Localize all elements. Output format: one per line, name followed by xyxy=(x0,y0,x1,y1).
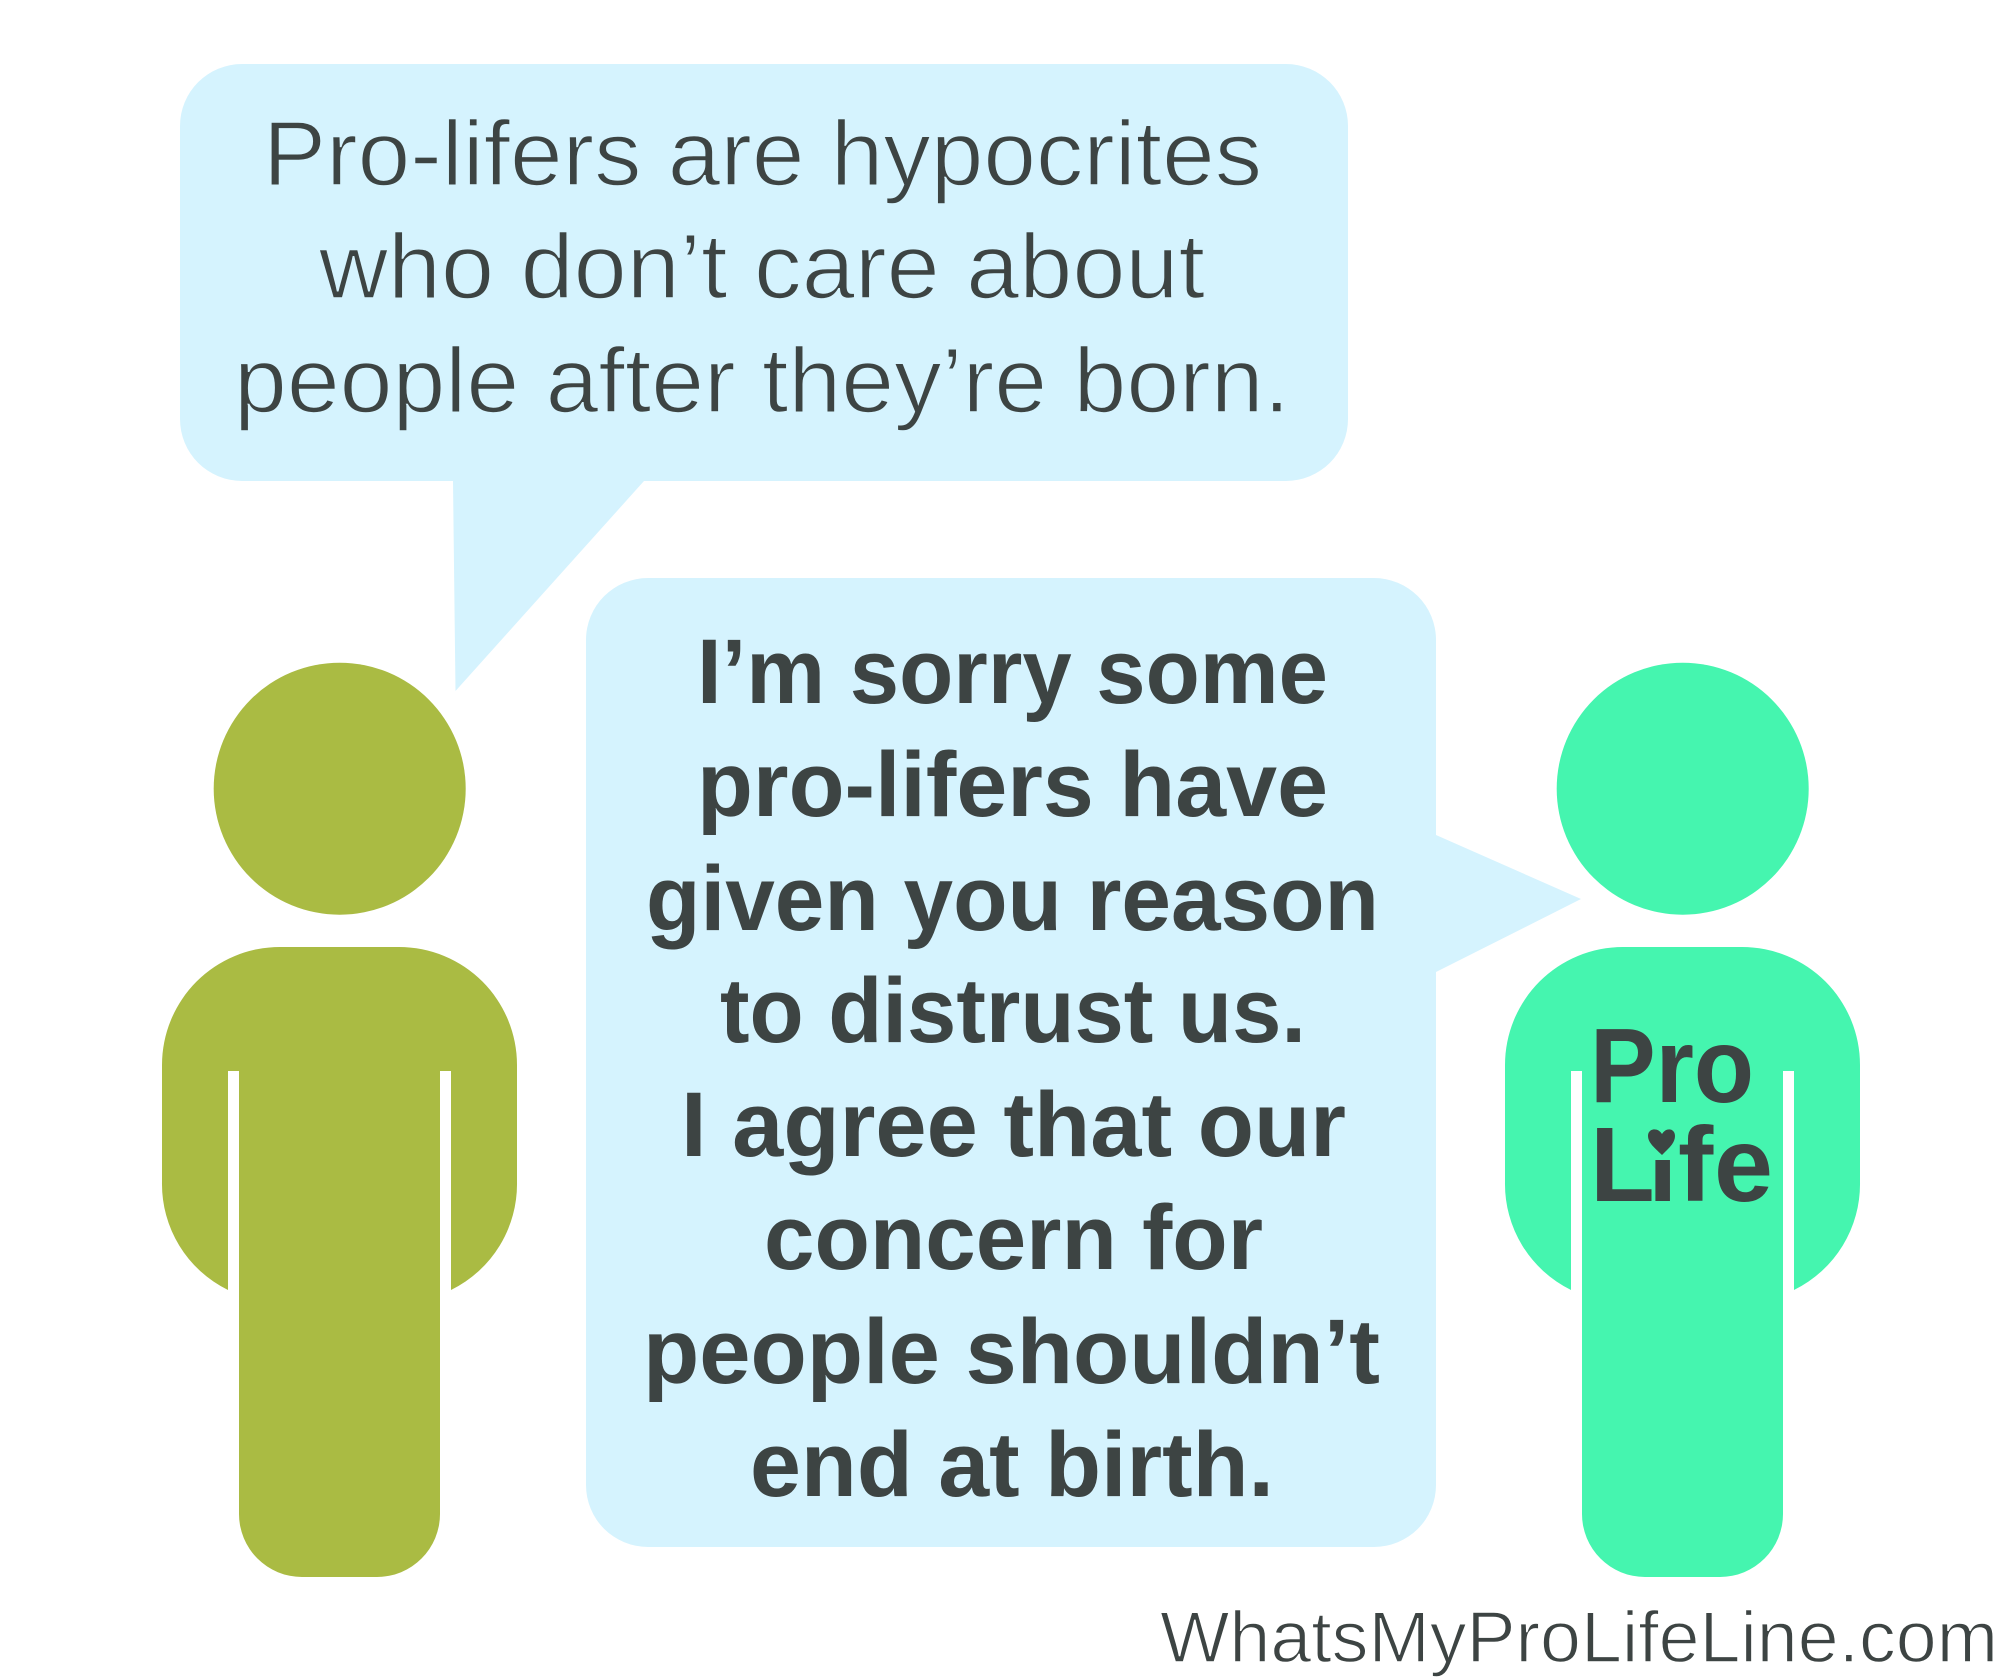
pro-lifer response text: concern for xyxy=(764,1187,1263,1289)
pro-lifer response text: to distrust us. xyxy=(720,960,1306,1062)
critic statement text: who don’t care about xyxy=(318,216,1205,318)
critic statement text: Pro-lifers are hypocrites xyxy=(263,103,1262,205)
pro-lifer response text: people shouldn’t xyxy=(643,1301,1380,1403)
shirt logo: Pro Life xyxy=(1590,1007,1773,1224)
icon: heart xyxy=(1648,1129,1675,1155)
critic statement text xyxy=(234,103,1290,432)
pro-lifer response text: end at birth. xyxy=(750,1414,1274,1516)
figure: pro-lifer (mint) xyxy=(1505,663,1860,1577)
pro-lifer response text: given you reason xyxy=(646,848,1379,950)
i-dot mask xyxy=(1651,1122,1675,1160)
critic statement text: people after they’re born. xyxy=(234,330,1290,432)
pro-lifer response text xyxy=(643,621,1380,1516)
torso and arms xyxy=(162,947,517,1577)
head xyxy=(214,663,466,915)
pro-lifer response text: I’m sorry some xyxy=(697,621,1328,723)
pro-lifer response text: I agree that our xyxy=(681,1074,1346,1176)
shirt logo: Pro Life: Life xyxy=(1590,1106,1773,1224)
figure: critic (olive) xyxy=(162,663,517,1577)
head xyxy=(1557,663,1809,915)
speech bubble: pro-lifer xyxy=(586,578,1581,1547)
shirt logo: Pro Life: Pro xyxy=(1590,1007,1754,1125)
website footer: WhatsMyProLifeLine.com xyxy=(1160,1598,1998,1677)
pro-lifer response text: pro-lifers have xyxy=(697,734,1328,836)
torso and arms xyxy=(1505,947,1860,1577)
speech bubble: critic xyxy=(180,64,1348,691)
